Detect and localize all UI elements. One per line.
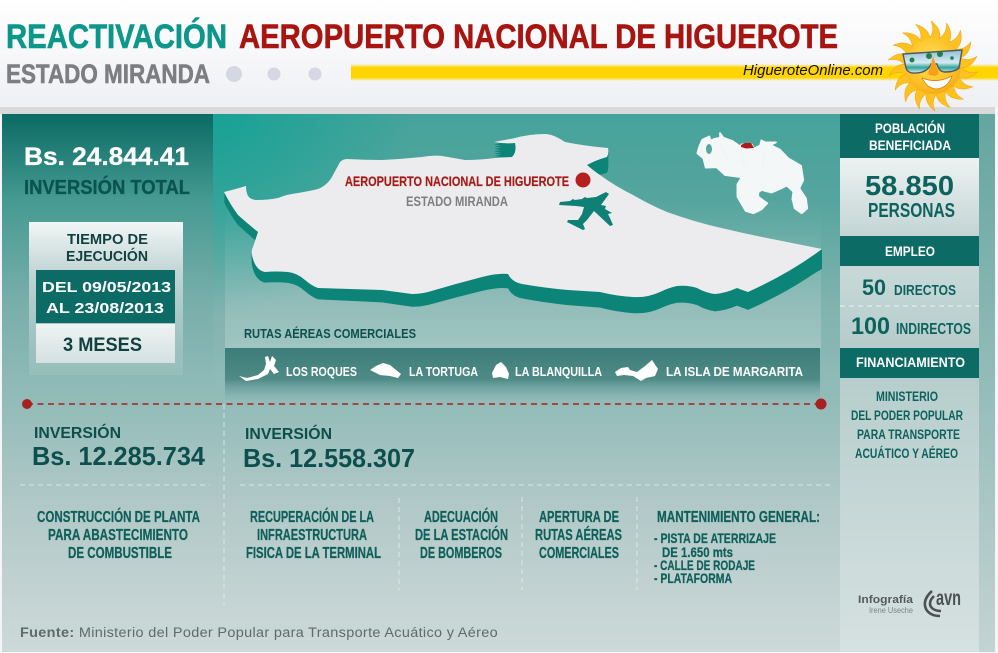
route: La Blanquilla — [492, 362, 603, 379]
execution time box: AL 23/08/2013 — [46, 301, 164, 317]
panel: total investment — [2, 114, 213, 400]
employment values: DIRECTOS — [894, 282, 956, 299]
credit and AVN logo — [858, 587, 961, 616]
decorative dots — [226, 66, 322, 82]
grey divider band — [0, 107, 995, 114]
employment values — [840, 266, 979, 348]
total label: INVERSIÓN TOTAL — [24, 175, 190, 199]
subtitle: estado miranda: ESTADO MIRANDA — [6, 59, 210, 89]
routes heading: RUTAS AÉREAS COMERCIALES — [244, 326, 416, 341]
highlighted state — [741, 143, 754, 148]
panel: right sidebar — [840, 114, 995, 652]
credit and AVN logo: avn — [936, 587, 961, 610]
text: fuel plant: DE COMBUSTIBLE — [68, 545, 172, 562]
employment values: 50 — [862, 275, 886, 300]
panel dividers — [20, 404, 830, 605]
text: general maintenance: DE 1.650 mts — [662, 544, 733, 560]
text: commercial routes opening: COMERCIALES — [539, 545, 619, 562]
execution time box: TIEMPO DE — [67, 232, 148, 248]
route: Los Roques — [239, 356, 357, 381]
icon: airplane — [559, 192, 613, 230]
text: terminal recovery: RECUPERACIÓN DE LA — [250, 508, 374, 526]
route: La Tortuga: LA TORTUGA — [409, 364, 478, 379]
airport marker — [576, 172, 590, 188]
text: fire station: DE LA ESTACIÓN — [415, 526, 508, 544]
population value: 58.850 — [865, 170, 954, 201]
funding text: MINISTERIO — [876, 389, 938, 404]
population header: POBLACIÓN — [875, 121, 945, 136]
credit and AVN logo: Irene Useche — [869, 605, 913, 615]
employment values: INDIRECTOS — [896, 321, 971, 338]
funding text: PARA TRANSPORTE — [857, 427, 960, 442]
text: fuel plant: PARA ABASTECIMIENTO — [48, 527, 188, 544]
execution time box: DEL 09/05/2013 — [42, 280, 171, 296]
text: terminal recovery: INFRAESTRUCTURA — [257, 527, 367, 544]
text: general maintenance: - PISTA DE ATERRIZAJE — [654, 530, 776, 546]
icon: sun with sunglasses — [887, 21, 979, 111]
investment right: Bs. 12.558.307 — [243, 443, 415, 473]
investment right — [243, 424, 415, 473]
funding header: FINANCIAMIENTO — [856, 355, 965, 370]
state label: ESTADO MIRANDA — [406, 193, 508, 209]
text: commercial routes opening: APERTURA DE — [539, 509, 619, 526]
text: commercial routes opening: RUTAS AÉREAS — [535, 527, 622, 544]
funding header — [840, 348, 979, 378]
investment left — [32, 423, 206, 471]
route: La Tortuga — [370, 363, 478, 379]
text: commercial routes opening — [535, 509, 622, 562]
employment header — [840, 236, 979, 266]
text: general maintenance — [654, 509, 820, 586]
population header: BENEFICIADA — [869, 138, 951, 153]
airport label: AEROPUERTO NACIONAL DE HIGUEROTE — [345, 173, 569, 189]
map of Miranda coast — [224, 134, 822, 316]
text: fire station: ADECUACIÓN — [424, 508, 498, 526]
investment left: INVERSIÓN — [34, 423, 121, 442]
header background — [0, 0, 998, 107]
population value — [840, 158, 979, 236]
text: fire station: DE BOMBEROS — [420, 545, 502, 562]
funding text — [840, 378, 979, 652]
text: general maintenance: MANTENIMIENTO GENERAL: — [657, 509, 820, 526]
investment right: INVERSIÓN — [245, 424, 332, 443]
credit and AVN logo: Infografía — [858, 594, 914, 606]
text: fuel plant: CONSTRUCCIÓN DE PLANTA — [37, 508, 200, 526]
route: Los Roques: LOS ROQUES — [286, 364, 357, 379]
investment left: Bs. 12.285.734 — [32, 441, 206, 471]
text: general maintenance: - PLATAFORMA — [654, 570, 732, 586]
route: Isla de Margarita — [615, 360, 804, 381]
route: Isla de Margarita: LA ISLA DE MARGARITA — [666, 364, 804, 379]
employment header: EMPLEO — [885, 244, 935, 259]
funding text: ACUÁTICO Y AÉREO — [855, 446, 958, 461]
title: reactivación: REACTIVACIÓN — [6, 18, 227, 56]
employment values: 100 — [851, 313, 890, 340]
funding text: DEL PODER POPULAR — [851, 408, 963, 423]
text: terminal recovery: FISICA DE LA TERMINAL — [246, 545, 381, 562]
text: general maintenance: - CALLE DE RODAJE — [654, 557, 755, 573]
red timeline — [22, 398, 826, 410]
execution time box: 3 MESES — [63, 335, 142, 356]
website label: HigueroteOnline.com — [743, 63, 883, 79]
total amount: Bs. 24.844.41 — [24, 143, 189, 171]
execution time box: EJECUCIÓN — [66, 247, 148, 265]
population value: PERSONAS — [868, 199, 955, 222]
population header — [840, 114, 979, 158]
panel: commercial air routes — [225, 326, 820, 400]
execution time box — [29, 222, 183, 375]
text: fire station — [415, 508, 508, 562]
source note: Fuente: Ministerio del Poder Popular para Transporte Acuático y Aéreo — [20, 625, 498, 640]
text: fuel plant — [37, 508, 200, 562]
yellow stripe — [351, 64, 998, 81]
text: terminal recovery — [246, 508, 381, 562]
route: La Blanquilla: LA BLANQUILLA — [515, 364, 603, 379]
title: aeropuerto nacional de higuerote: AEROPUERTO NACIONAL DE HIGUEROTE — [239, 18, 838, 56]
icon: Venezuela map — [697, 133, 807, 213]
